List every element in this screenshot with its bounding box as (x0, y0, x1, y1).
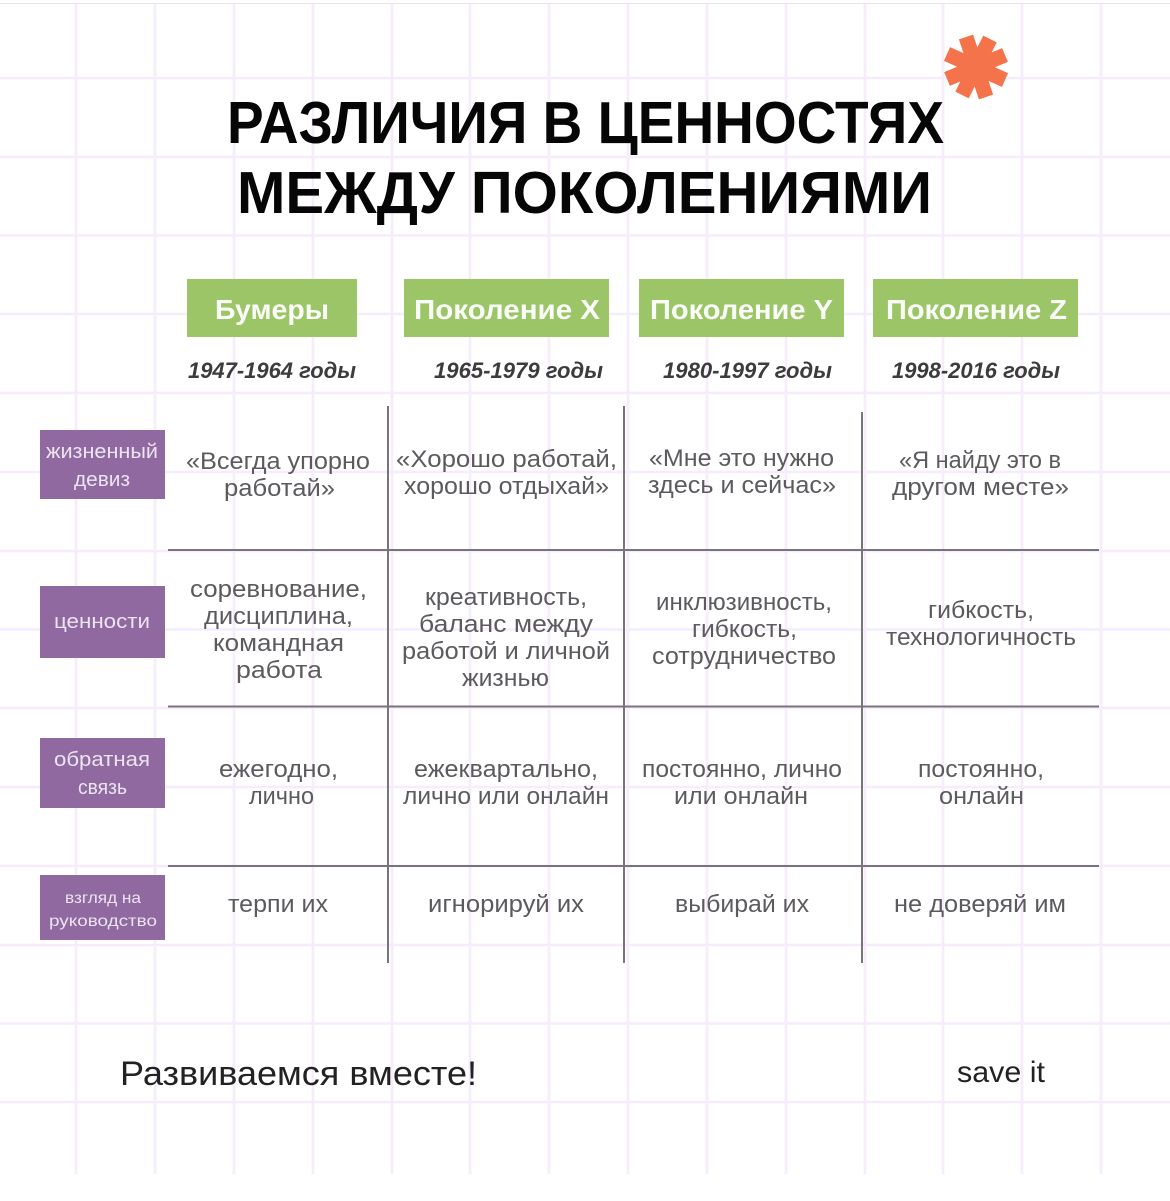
column header: Бумеры: Бумеры (215, 294, 329, 325)
row label: жизненный девиз: жизненный (46, 441, 158, 463)
cell: values boomers: командная (213, 630, 344, 657)
cell: feedback generation X (403, 756, 609, 810)
column header: Поколение X (404, 279, 609, 337)
cell: feedback boomers: лично (249, 783, 314, 810)
cell: values generation Z: гибкость, (928, 597, 1034, 624)
cell: motto boomers: «Всегда упорно (186, 448, 370, 475)
cell: leadership generation Z: не доверяй им (894, 891, 1066, 918)
title (227, 90, 944, 226)
cell: leadership generation Y: выбирай их (675, 891, 809, 918)
cell: values boomers (190, 576, 367, 684)
cell: leadership generation X: игнорируй их (428, 891, 584, 918)
column header: Поколение Y: Поколение Y (650, 294, 833, 325)
column header: Поколение Z (873, 279, 1078, 337)
cell: motto generation Z: другом месте» (892, 474, 1069, 501)
cell: values boomers: соревнование, (190, 576, 367, 603)
row label: взгляд на руководство: взгляд на (65, 890, 141, 907)
cell: feedback generation Z: онлайн (939, 783, 1024, 810)
cell: values generation X: работой и личной (402, 638, 610, 665)
cell: values generation Y: инклюзивность, (656, 589, 832, 616)
row label: взгляд на руководство (40, 875, 165, 940)
cell: values generation X: креативность, (425, 584, 587, 611)
cell: values generation Z (886, 597, 1076, 651)
row label: ценности: ценности (54, 611, 150, 633)
cell: motto generation Y: здесь и сейчас» (648, 472, 836, 499)
column header: Бумеры (187, 279, 357, 337)
cell: motto generation Y (648, 445, 836, 499)
column header: Поколение Y (639, 279, 844, 337)
cell: values generation X: баланс между (419, 611, 593, 638)
row label: жизненный девиз: девиз (74, 469, 130, 491)
cell: feedback generation Z (918, 756, 1044, 810)
cell: feedback boomers: ежегодно, (219, 756, 338, 783)
row label: обратная связь (40, 738, 165, 808)
cell: motto generation X (396, 446, 617, 500)
cell: leadership boomers: терпи их (228, 891, 328, 918)
cell: values generation Y (652, 589, 836, 670)
cell: values generation Y: гибкость, (692, 616, 797, 643)
cell: feedback generation Y (642, 756, 842, 810)
column header: Поколение X: Поколение X (414, 294, 600, 325)
column header: Поколение Z: Поколение Z (886, 294, 1067, 325)
years: generation Y: 1980-1997 годы (663, 358, 832, 383)
cell: motto boomers (186, 448, 370, 502)
years: generation X: 1965-1979 годы (434, 358, 603, 383)
cell: feedback boomers (219, 756, 338, 810)
cell: values boomers: работа (236, 657, 323, 684)
cell: feedback generation Y: постоянно, лично (642, 756, 842, 783)
row label: ценности (40, 586, 165, 658)
cell: values generation X (402, 584, 610, 692)
cell: feedback generation X: ежеквартально, (414, 756, 598, 783)
row label: обратная связь: обратная (54, 749, 150, 771)
cell: values boomers: дисциплина, (204, 603, 353, 630)
cell: values generation X: жизнью (462, 665, 549, 692)
years: boomers: 1947-1964 годы (188, 358, 356, 383)
cell: motto generation Y: «Мне это нужно (649, 445, 834, 472)
cell: motto generation Z: «Я найду это в (899, 447, 1061, 474)
footer: save it: save it (957, 1056, 1046, 1089)
cell: motto boomers: работай» (224, 475, 335, 502)
table grid lines (168, 406, 1099, 963)
row label: жизненный девиз (40, 430, 165, 499)
cell: feedback generation Z: постоянно, (918, 756, 1044, 783)
title: МЕЖДУ ПОКОЛЕНИЯМИ (237, 160, 932, 226)
title: РАЗЛИЧИЯ В ЦЕННОСТЯХ (227, 90, 944, 156)
cell: feedback generation Y: или онлайн (674, 783, 808, 810)
cell: motto generation X: хорошо отдыхай» (404, 473, 609, 500)
cell: motto generation Z (892, 447, 1069, 501)
row label: обратная связь: связь (78, 777, 127, 799)
cell: values generation Z: технологичность (886, 624, 1076, 651)
years: generation Z: 1998-2016 годы (892, 358, 1060, 383)
cell: feedback generation X: лично или онлайн (403, 783, 609, 810)
cell: values generation Y: сотрудничество (652, 643, 836, 670)
row label: взгляд на руководство: руководство (49, 913, 157, 930)
footer: slogan: Развиваемся вместе! (120, 1055, 477, 1093)
cell: motto generation X: «Хорошо работай, (396, 446, 617, 473)
icon: orange asterisk (947, 37, 1005, 97)
